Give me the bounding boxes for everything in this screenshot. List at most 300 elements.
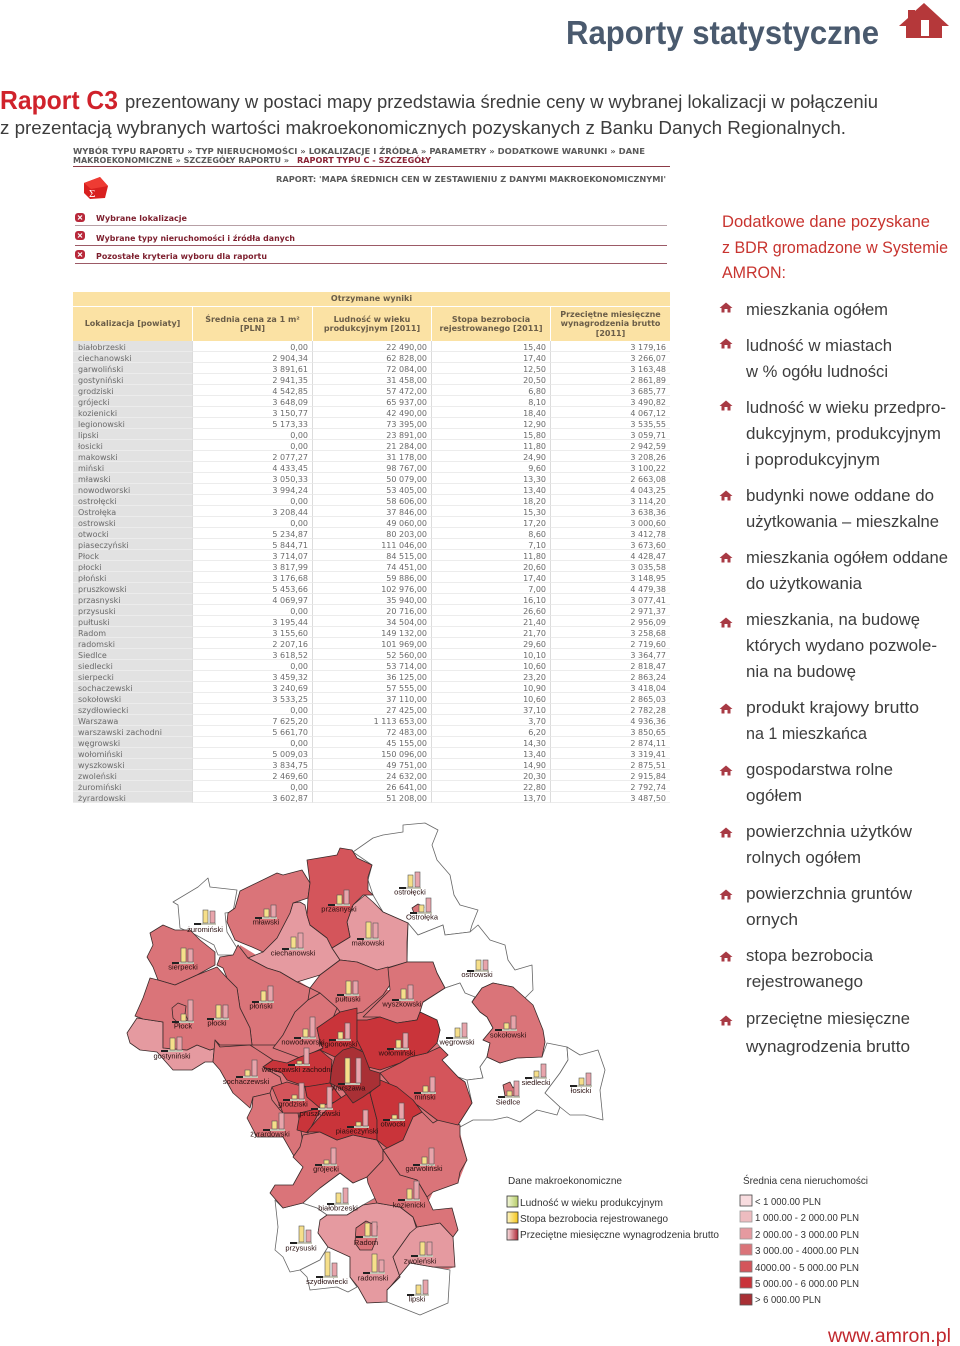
table rows: 0,00	[290, 739, 308, 748]
table rows: 2 719,60	[630, 640, 666, 649]
table rows: 62 828,00	[386, 354, 427, 363]
list item: użytki rolne	[720, 822, 913, 867]
table rows: 2 875,51	[630, 761, 666, 770]
table rows: kozienicki	[78, 409, 117, 418]
table rows: 3 150,77	[272, 409, 308, 418]
criteria section 2	[75, 231, 667, 246]
table rows: 9,60	[528, 464, 546, 473]
table rows: zwoleński	[78, 772, 117, 781]
chart: wyszkowski: wyszkowski	[381, 1000, 422, 1008]
table rows: 8,10	[528, 398, 546, 407]
list item: gospodarstwa rolne: gospodarstwa rolne	[746, 760, 893, 779]
chart: zwoleński	[404, 1242, 437, 1266]
chart: grodziski: grodziski	[278, 1100, 308, 1108]
chart: zwoleński: zwoleński	[404, 1256, 437, 1266]
breadcrumbs: MAKROEKONOMICZNE » SZCZEGÓŁY RAPORTU »	[73, 154, 289, 165]
table rows: 27 425,00	[386, 706, 427, 715]
table rows: 0,00	[290, 662, 308, 671]
table rows: 49 060,00	[386, 519, 427, 528]
chart: białobrzeski: białobrzeski	[318, 1204, 358, 1212]
chart: sokołowski	[490, 1016, 526, 1040]
legend: average price: 1 000.00 - 2 000.00 PLN	[755, 1212, 859, 1224]
chart: Warszawa	[331, 1058, 366, 1092]
chart: łosicki	[570, 1073, 592, 1095]
table rows: 3 258,68	[630, 629, 666, 638]
chart: sochaczewski: sochaczewski	[223, 1077, 269, 1086]
table rows: 20 716,00	[386, 607, 427, 616]
table rows: ciechanowski	[78, 354, 131, 363]
table rows: 15,30	[523, 508, 546, 517]
list item: ludność w miastach: w % ogółu ludności	[745, 362, 888, 381]
table rows: 15,40	[523, 343, 546, 352]
list item: ludność w wieku: i poprodukcyjnym	[746, 450, 880, 469]
table rows: 10,90	[523, 684, 546, 693]
table rows: 84 515,00	[386, 552, 427, 561]
list item: pozwolenia: nia na budowę	[746, 662, 856, 681]
chart: Ostrołęka	[406, 898, 439, 922]
list item: grunty orne: powierzchnia gruntów	[746, 884, 913, 903]
table column headers: Lokalizacja [powiaty]	[85, 319, 180, 328]
intro text line 1: prezentowany w postaci mapy przedstawia średnie ceny w wybranej lokalizacji w połączeniu	[125, 92, 878, 112]
table rows: 10,60	[523, 695, 546, 704]
region fills: 3000-4000 PLN	[135, 870, 545, 1250]
table column headers: [PLN]	[240, 324, 265, 333]
legend: macroeconomic data	[507, 1175, 719, 1241]
table rows: 3 533,25	[272, 695, 308, 704]
table rows: 2 956,09	[630, 618, 666, 627]
legend: average price: 5 000.00 - 6 000.00 PLN	[755, 1278, 859, 1290]
table rows: 7 625,20	[272, 717, 308, 726]
chart: węgrowski	[438, 1023, 475, 1046]
list item: pozwolenia: których wydano pozwole-	[746, 636, 937, 655]
table rows: 3 195,44	[272, 618, 308, 627]
list heading: z BDR gromadzone w Systemie	[722, 238, 948, 257]
table rows: 74 451,00	[386, 563, 427, 572]
table rows: 3 000,60	[630, 519, 666, 528]
table rows: 80 203,00	[386, 530, 427, 539]
chart: wyszkowski	[381, 985, 422, 1008]
table rows: 58 606,00	[386, 497, 427, 506]
chart: miński: miński	[414, 1092, 436, 1102]
table rows: 31 178,00	[386, 453, 427, 462]
breadcrumbs: WYBÓR TYPU RAPORTU » TYP NIERUCHOMOŚCI » LOKALIZACJE I ŹRÓDŁA » PARAMETRY » DODATKOWE WARUNKI » DANE	[73, 145, 645, 156]
list item: wynagrodzenia: wynagrodzenia brutto	[745, 1037, 910, 1056]
table rows: 4 043,25	[630, 486, 666, 495]
table rows: 49 751,00	[386, 761, 427, 770]
table rows: 6,20	[528, 728, 546, 737]
table rows: 3 155,60	[272, 629, 308, 638]
table rows: 20,50	[523, 376, 546, 385]
chart: ostrowski: ostrowski	[461, 970, 493, 979]
chart: warszawski zachodni: warszawski zachodni	[261, 1065, 333, 1074]
list item: budynki nowe: użytkowania – mieszkalne	[746, 512, 939, 531]
table rows: 2 874,11	[630, 739, 666, 748]
region fills: 5000-6000 PLN	[263, 1008, 440, 1148]
chart: Płock: Płock	[174, 1022, 192, 1030]
table rows: 13,40	[523, 750, 546, 759]
list item: gospodarstwa rolne	[720, 760, 893, 805]
table rows: 6,80	[528, 387, 546, 396]
chart: Radom	[354, 1222, 378, 1247]
chart: wołomiński	[378, 1033, 416, 1058]
table rows: 5 661,70	[272, 728, 308, 737]
breadcrumbs	[73, 145, 645, 165]
chart: płoński: płoński	[249, 1002, 273, 1010]
table rows: 2 663,08	[630, 475, 666, 484]
list item: pozwolenia: mieszkania, na budowę	[746, 610, 920, 629]
chart: lipski: lipski	[409, 1294, 426, 1304]
list item: stopa bezrobocia: stopa bezrobocia	[746, 946, 874, 965]
table rows: 4 069,97	[272, 596, 308, 605]
table rows: 4 936,36	[630, 717, 666, 726]
chart: lipski	[407, 1280, 429, 1304]
table rows: 3 179,16	[630, 343, 666, 352]
legend: macroeconomic data: Przeciętne miesięczne wynagrodzenia brutto	[520, 1229, 719, 1241]
list item: użytki rolne: rolnych ogółem	[746, 848, 861, 867]
table rows: Warszawa	[78, 717, 118, 726]
chart: Płock	[172, 1000, 194, 1030]
chart: pruszkowski	[300, 1087, 341, 1118]
table rows: 3 148,95	[630, 574, 666, 583]
region outlines: no price data	[173, 823, 605, 1315]
table rows: 3 490,82	[630, 398, 666, 407]
icon: red cube	[84, 177, 108, 200]
table rows: 18,40	[523, 409, 546, 418]
table rows: 7,00	[528, 585, 546, 594]
list item: mieszkania oddane: do użytkowania	[746, 574, 863, 593]
table rows: piaseczyński	[78, 541, 129, 550]
table rows: płocki	[78, 563, 102, 572]
table rows: 21 284,00	[386, 442, 427, 451]
table rows: 0,00	[290, 607, 308, 616]
table rows: sokołowski	[78, 695, 121, 704]
table rows: 42 490,00	[386, 409, 427, 418]
table column headers: Ludność w wieku	[334, 314, 410, 324]
table rows: wyszkowski	[78, 761, 124, 770]
table rows	[73, 341, 670, 803]
chart: żyrardowski	[250, 1113, 290, 1138]
legend: average price: 2 000.00 - 3 000.00 PLN	[755, 1229, 859, 1241]
region fill: Warszawa	[330, 1047, 380, 1103]
table rows: ostrołęcki	[78, 497, 117, 506]
table rows: 8,60	[528, 530, 546, 539]
table rows: węgrowski	[78, 739, 120, 748]
list item: mieszkania ogółem: mieszkania ogółem	[746, 300, 888, 319]
chart: Radom: Radom	[354, 1238, 378, 1247]
table rows: 2 904,34	[272, 354, 308, 363]
legend: macroeconomic data: Stopa bezrobocia rejestrowanego	[520, 1213, 668, 1225]
table rows: 45 155,00	[386, 739, 427, 748]
table rows: Ostrołęka	[78, 508, 116, 517]
table rows: 3 208,44	[272, 508, 308, 517]
table rows: otwocki	[78, 530, 109, 539]
list item: produkt krajowy: produkt krajowy brutto	[746, 698, 919, 717]
table rows: 150 096,00	[381, 750, 427, 759]
table rows: 24,90	[523, 453, 546, 462]
list item: mieszkania oddane: mieszkania ogółem oddane	[746, 548, 948, 567]
table rows: 3 817,99	[272, 563, 308, 572]
table rows: 17,40	[523, 354, 546, 363]
table rows: 3 114,20	[630, 497, 666, 506]
table rows: 0,00	[290, 706, 308, 715]
chart: ostrołęcki: ostrołęcki	[394, 888, 426, 896]
table rows: 20,30	[523, 772, 546, 781]
chart: kozienicki	[393, 1181, 426, 1210]
table column headers: Stopa bezrobocia	[452, 314, 530, 324]
table rows: 31 458,00	[386, 376, 427, 385]
table rows: 3 266,07	[630, 354, 666, 363]
table rows: sochaczewski	[78, 684, 133, 693]
table rows: żuromiński	[78, 783, 121, 792]
chart: mławski: mławski	[253, 918, 280, 926]
table rows: 98 767,00	[386, 464, 427, 473]
chart: legionowski	[319, 1023, 358, 1048]
table rows: 13,30	[523, 475, 546, 484]
list item: wynagrodzenia	[720, 1009, 910, 1056]
chart: legionowski: legionowski	[319, 1040, 358, 1048]
table rows: 10,10	[523, 651, 546, 660]
table rows: 72 084,00	[386, 365, 427, 374]
table rows: 23,20	[523, 673, 546, 682]
table rows: 7,10	[528, 541, 546, 550]
table rows: 35 940,00	[386, 596, 427, 605]
table rows: 14,90	[523, 761, 546, 770]
table rows: 0,00	[290, 442, 308, 451]
table rows: łosicki	[78, 442, 103, 451]
table rows: 3 176,68	[272, 574, 308, 583]
chart: radomski	[358, 1254, 389, 1282]
table rows: 37,10	[523, 706, 546, 715]
results table	[73, 292, 670, 803]
legend: average price: 3 000.00 - 4000.00 PLN	[755, 1245, 859, 1257]
breadcrumbs: RAPORT TYPU C - SZCZEGÓŁY	[297, 154, 431, 165]
table rows: 4 067,12	[630, 409, 666, 418]
table rows: pułtuski	[78, 618, 110, 627]
chart: piaseczyński	[336, 1110, 379, 1136]
region fills: 4000-5000 PLN	[272, 848, 472, 1125]
table rows: 102 976,00	[381, 585, 427, 594]
table rows: radomski	[78, 640, 115, 649]
table rows: 21,70	[523, 629, 546, 638]
chart: przysuski: przysuski	[285, 1244, 317, 1252]
list item: gospodarstwa rolne: ogółem	[746, 786, 802, 805]
chart: grójecki: grójecki	[313, 1164, 339, 1174]
map backing silhouette	[215, 945, 472, 1287]
table rows: 23 891,00	[386, 431, 427, 440]
table rows: 3 418,04	[630, 684, 666, 693]
list item: użytki rolne: powierzchnia użytków	[746, 822, 913, 841]
table rows: 12,50	[523, 365, 546, 374]
list item: mieszkania oddane	[720, 548, 948, 593]
list item: ludność w miastach: ludność w miastach	[746, 336, 892, 355]
table rows: 2 861,89	[630, 376, 666, 385]
table rows: 0,00	[290, 431, 308, 440]
table rows: 3 487,50	[630, 794, 666, 803]
list item: produkt krajowy	[720, 698, 919, 743]
region fills: 2000-3000 PLN	[127, 895, 455, 1303]
table rows: 3 850,65	[630, 728, 666, 737]
list item: budynki nowe: budynki nowe oddane do	[746, 486, 934, 505]
table rows: 2 469,60	[272, 772, 308, 781]
table rows: 3 714,07	[272, 552, 308, 561]
chart: otwocki	[380, 1103, 406, 1128]
table rows: 73 395,00	[386, 420, 427, 429]
table rows: szydłowiecki	[78, 706, 128, 715]
table rows: 2 971,37	[630, 607, 666, 616]
legend: average price	[740, 1174, 868, 1306]
chart: przasnyski: przasnyski	[321, 904, 357, 914]
table rows: 3 364,77	[630, 651, 666, 660]
table rows: 5 173,33	[272, 420, 308, 429]
list item: grunty orne	[720, 884, 913, 929]
legend: average price: < 1 000.00 PLN	[755, 1196, 821, 1208]
table rows: 3 459,32	[272, 673, 308, 682]
table column headers: Przeciętne miesięczne	[560, 310, 661, 319]
table rows: białobrzeski	[78, 343, 126, 352]
chart: warszawski zachodni	[261, 1048, 333, 1074]
table rows: 3 673,60	[630, 541, 666, 550]
criteria section 1	[75, 213, 667, 226]
table rows: 13,40	[523, 486, 546, 495]
table rows: 18,20	[523, 497, 546, 506]
chart: siedlecki	[522, 1064, 551, 1087]
criteria section 3: Pozostałe kryteria wyboru dla raportu	[96, 252, 267, 261]
table column headers: Średnia cena za 1 m²	[205, 314, 300, 324]
list item: ludność w wieku: dukcyjnym, produkcyjnym	[746, 424, 941, 443]
chart: ostrowski	[461, 960, 493, 979]
chart: otwocki: otwocki	[380, 1120, 406, 1128]
criteria section 1: Wybrane lokalizacje	[96, 214, 188, 223]
table rows: 3 618,52	[272, 651, 308, 660]
table rows: płoński	[78, 574, 106, 583]
table rows: 3 050,33	[272, 475, 308, 484]
icon: red cube: Σ	[89, 188, 95, 200]
table rows: 15,80	[523, 431, 546, 440]
table rows: 29,60	[523, 640, 546, 649]
chart: pułtuski	[335, 981, 361, 1004]
table column headers: rejestrowanego [2011]	[439, 324, 543, 333]
table rows: 3 412,78	[630, 530, 666, 539]
chart: ostrołęcki	[394, 872, 426, 896]
chart: sokołowski: sokołowski	[490, 1030, 526, 1040]
table rows: 3 059,71	[630, 431, 666, 440]
table column headers	[73, 307, 670, 341]
table rows: 4 479,38	[630, 585, 666, 594]
table rows: garwoliński	[78, 365, 123, 374]
table rows: 5 844,71	[272, 541, 308, 550]
screenshot of report application	[73, 145, 670, 803]
table rows: 5 234,87	[272, 530, 308, 539]
chart: Siedlce	[496, 1081, 520, 1106]
table rows: 26 641,00	[386, 783, 427, 792]
table rows: pruszkowski	[78, 585, 127, 594]
table rows: 101 969,00	[381, 640, 427, 649]
table rows: mławski	[78, 475, 111, 484]
table rows: grójecki	[78, 398, 109, 407]
legend: average price: Średnia cena nieruchomości	[743, 1174, 868, 1187]
table rows: makowski	[78, 453, 118, 462]
chart: grodziski	[278, 1083, 308, 1108]
table rows: 37 846,00	[386, 508, 427, 517]
table rows: 17,20	[523, 519, 546, 528]
legend: average price: 4000.00 - 5 000.00 PLN	[755, 1262, 859, 1274]
table rows: 24 632,00	[386, 772, 427, 781]
table rows: 2 941,35	[272, 376, 308, 385]
table rows: 10,60	[523, 662, 546, 671]
table rows: 51 208,00	[386, 794, 427, 803]
chart: białobrzeski	[318, 1188, 358, 1212]
chart: grójecki	[313, 1148, 339, 1174]
top text and house icon	[0, 3, 949, 138]
table rows: 4 433,45	[272, 464, 308, 473]
chart: żuromiński: żuromiński	[187, 925, 223, 934]
report name: RAPORT: 'MAPA ŚREDNICH CEN W ZESTAWIENIU Z DANYMI MAKROEKONOMICZNYMI'	[276, 173, 666, 184]
table title band: Otrzymane wyniki	[331, 294, 412, 303]
table rows: 3 100,22	[630, 464, 666, 473]
table rows: 3 077,41	[630, 596, 666, 605]
table rows: 3 240,69	[272, 684, 308, 693]
list heading: AMRON:	[722, 263, 786, 282]
table rows: nowodworski	[78, 486, 130, 495]
table rows: legionowski	[78, 420, 125, 429]
chart: piaseczyński: piaseczyński	[336, 1126, 379, 1136]
table rows: gostyniński	[78, 376, 123, 385]
chart: ciechanowski: ciechanowski	[271, 948, 316, 958]
chart: kozienicki: kozienicki	[393, 1200, 426, 1210]
chart: radomski: radomski	[358, 1274, 389, 1282]
chart: pułtuski: pułtuski	[335, 994, 361, 1004]
table rows: 3,70	[528, 717, 546, 726]
title: Raporty statystyczne	[566, 14, 879, 51]
table column headers: produkcyjnym [2011]	[324, 324, 420, 333]
table rows: 11,80	[523, 442, 546, 451]
table rows: warszawski zachodni	[78, 728, 162, 737]
table rows: 53 714,00	[386, 662, 427, 671]
chart: gostyniński	[153, 1037, 191, 1060]
chart: garwoliński	[405, 1148, 443, 1173]
table rows: 16,10	[523, 596, 546, 605]
table rows: 22,80	[523, 783, 546, 792]
table column headers: [2011]	[596, 329, 625, 338]
table rows: 50 079,00	[386, 475, 427, 484]
table rows: 13,70	[523, 794, 546, 803]
chart: łosicki: łosicki	[571, 1086, 592, 1095]
table rows: 52 560,00	[386, 651, 427, 660]
table rows: 59 886,00	[386, 574, 427, 583]
table rows: 57 555,00	[386, 684, 427, 693]
table rows: 5 009,03	[272, 750, 308, 759]
table rows: 2 077,27	[272, 453, 308, 462]
table rows: 2 207,16	[272, 640, 308, 649]
criteria section 2: Wybrane typy nieruchomości i źródła danych	[96, 233, 295, 243]
table rows: 3 163,48	[630, 365, 666, 374]
chart: sierpecki: sierpecki	[168, 962, 198, 972]
table rows: 5 453,66	[272, 585, 308, 594]
table rows: żyrardowski	[78, 794, 126, 803]
table rows: przasnyski	[78, 596, 120, 605]
chart: mławski	[253, 905, 280, 926]
table rows: 3 602,87	[272, 794, 308, 803]
table rows: 2 863,24	[630, 673, 666, 682]
table rows: 36 125,00	[386, 673, 427, 682]
intro text line 2: z prezentacją wybranych wartości makroekonomicznych pozyskanych z Banku Danych Regionalnych.	[0, 118, 846, 138]
table title band	[73, 292, 670, 307]
table rows: miński	[78, 464, 104, 473]
chart: garwoliński: garwoliński	[405, 1164, 443, 1173]
legend: macroeconomic data: Ludność w wieku produkcyjnym	[520, 1197, 663, 1209]
list item: pozwolenia	[720, 610, 937, 681]
table rows: 2 792,74	[630, 783, 666, 792]
